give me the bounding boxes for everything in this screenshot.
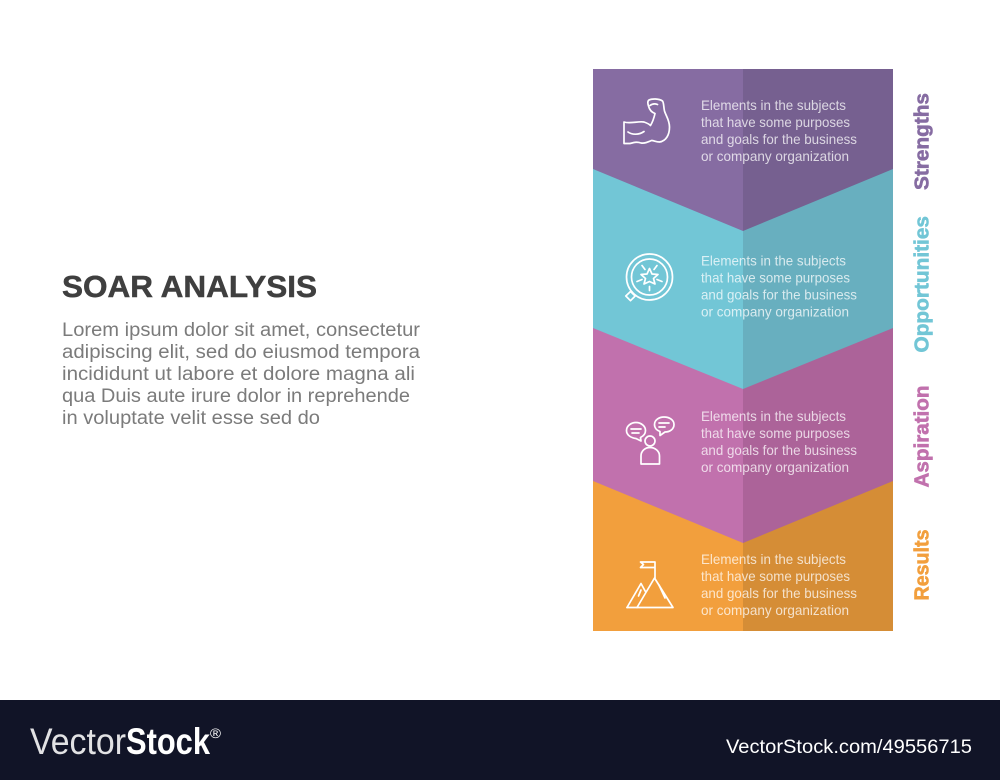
text: results description: and goals for the business bbox=[701, 586, 857, 601]
text: results description bbox=[701, 552, 857, 618]
title: SOAR ANALYSIS bbox=[62, 269, 317, 304]
panel: opportunities bbox=[593, 160, 893, 389]
label: Strengths: Strengths bbox=[912, 93, 934, 190]
footer logo: ® bbox=[210, 725, 222, 741]
text: opportunities description: and goals for the business bbox=[701, 288, 857, 302]
panel: aspiration bbox=[593, 315, 893, 543]
footer logo bbox=[30, 721, 222, 762]
label: Aspiration: Aspiration bbox=[912, 386, 934, 488]
text: opportunities description: that have some purposes bbox=[701, 270, 850, 286]
label: Opportunities: Opportunities bbox=[912, 216, 934, 352]
intro text block: qua Duis aute irure dolor in reprehende bbox=[62, 386, 410, 407]
text: strengths description: that have some purposes bbox=[701, 115, 850, 130]
panel: strengths bbox=[593, 69, 893, 231]
text: aspiration description: that have some purposes bbox=[701, 426, 850, 441]
text: aspiration description: Elements in the subjects bbox=[701, 409, 846, 424]
text: aspiration description bbox=[701, 409, 857, 475]
intro text block: Lorem ipsum dolor sit amet, consectetur bbox=[62, 320, 421, 341]
text: strengths description: or company organization bbox=[701, 149, 849, 164]
text: opportunities description: or company organization bbox=[701, 304, 849, 320]
panel: results bbox=[593, 470, 893, 631]
icon: person with speech bubbles bbox=[626, 417, 674, 464]
text: aspiration description: and goals for the business bbox=[701, 443, 857, 458]
intro text block bbox=[62, 320, 421, 429]
footer bar bbox=[0, 700, 1000, 780]
text: opportunities description bbox=[701, 254, 857, 320]
text: strengths description: and goals for the business bbox=[701, 132, 857, 147]
text: opportunities description: Elements in the subjects bbox=[701, 254, 846, 268]
icon: mountain with flag bbox=[627, 562, 673, 608]
intro text block: adipiscing elit, sed do eiusmod tempora bbox=[62, 342, 420, 363]
label: Results: Results bbox=[912, 530, 934, 600]
footer image id: VectorStock.com/49556715 bbox=[726, 736, 972, 758]
icon: flexed arm bbox=[624, 99, 670, 144]
text: strengths description: Elements in the subjects bbox=[701, 98, 846, 113]
footer logo: Vector bbox=[30, 721, 126, 762]
text: aspiration description: or company organization bbox=[701, 460, 849, 475]
icon: star badge bbox=[626, 254, 672, 301]
intro text block: in voluptate velit esse sed do bbox=[62, 408, 320, 429]
text: results description: Elements in the subjects bbox=[701, 552, 846, 567]
footer logo: Stock bbox=[126, 721, 210, 762]
intro text block: incididunt ut labore et dolore magna ali bbox=[62, 364, 415, 385]
text: results description: or company organization bbox=[701, 603, 849, 618]
text: results description: that have some purposes bbox=[701, 569, 850, 584]
text: strengths description bbox=[701, 98, 857, 164]
chevron stack bbox=[593, 69, 893, 631]
